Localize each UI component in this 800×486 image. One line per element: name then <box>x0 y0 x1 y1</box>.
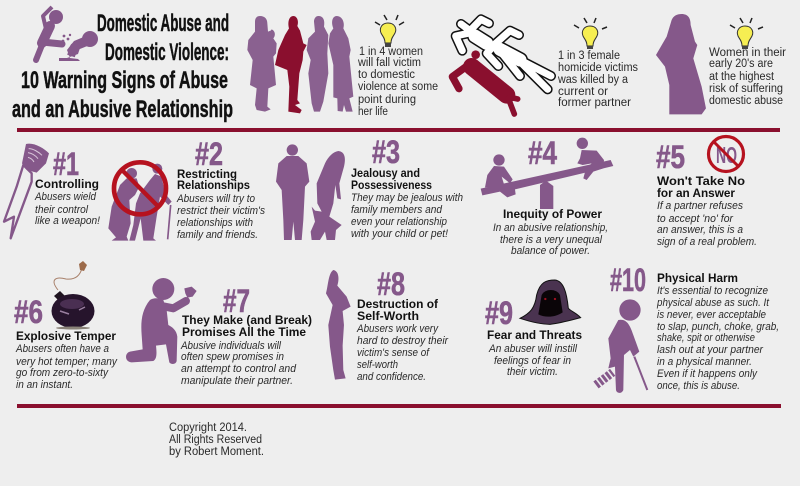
title <box>12 10 233 123</box>
panel: sign 3 jealousy and possessiveness: Possessiveness <box>351 180 432 192</box>
panel: sign 2 restricting relationships: Abusers will try to <box>176 193 255 205</box>
icon: crime scene body outlines <box>452 19 551 114</box>
icon: crossed out NO: NO <box>716 142 737 168</box>
panel: sign 8 destruction of self-worth: Self-Worth <box>357 311 419 323</box>
icon: woman silhouette <box>656 14 706 114</box>
stat: 1 in 3 female homicide victims: was killed by a <box>557 74 629 86</box>
stat: 1 in 4 women: will fall victim <box>357 57 421 69</box>
panel: sign 9 fear and threats <box>485 280 582 378</box>
panel: sign 5 won't take no for an answer: to accept 'no' for <box>657 213 734 225</box>
panel: sign 2 restricting relationships: relationships with <box>177 217 253 229</box>
panel: sign 1 controlling: Controlling <box>35 179 99 191</box>
stat: 1 in 3 female homicide victims: former partner <box>558 97 631 109</box>
title: Domestic Abuse and <box>97 10 229 37</box>
icon: raised fist <box>4 144 49 238</box>
panel: sign 4 inequity of power: In an abusive relationship, <box>493 222 608 234</box>
icon: seesaw with two figures <box>481 138 613 209</box>
panel: sign 10 physical harm: shake, spit or otherwise <box>657 332 755 344</box>
icon: kneeling man with flowers <box>126 278 197 364</box>
panel: sign 7 promises: Promises All the Time <box>182 327 306 339</box>
panel: sign 10 physical harm: is never, ever acceptable <box>657 309 766 321</box>
panel: sign 2 restricting relationships: #2 <box>195 136 223 172</box>
stat: women in their early 20's: risk of suffering <box>709 83 783 95</box>
stat: 1 in 4 women: violence at some <box>358 81 438 93</box>
panel: sign 8 destruction of self-worth: and confidence. <box>357 371 426 383</box>
stat: 1 in 3 female homicide victims: 1 in 3 female <box>558 50 620 62</box>
panel: sign 5 won't take no for an answer: an answer, this is a <box>657 224 743 236</box>
icon: injured man on crutch <box>596 299 647 393</box>
stat: 1 in 3 female homicide victims <box>557 50 638 109</box>
panel: sign 6 explosive temper: go from zero-to-sixty <box>16 367 109 379</box>
panel: sign 10 physical harm: It's essential to recognize <box>657 285 768 297</box>
stat: 1 in 4 women: her life <box>358 106 388 118</box>
panel: sign 2 restricting relationships <box>108 136 265 241</box>
panel: sign 10 physical harm: Physical Harm <box>657 273 738 285</box>
panel: sign 9 fear and threats: their victim. <box>507 366 558 378</box>
panel: sign 7 promises: manipulate their partner. <box>181 375 293 387</box>
panel: sign 6 explosive temper: Explosive Temper <box>16 331 117 343</box>
stat: 1 in 4 women <box>357 46 438 118</box>
panel: sign 2 restricting relationships: Restricting <box>177 169 237 181</box>
panel: sign 1 controlling: Abusers wield <box>34 191 97 203</box>
panel: sign 7 promises: often spew promises in <box>181 351 284 363</box>
panel: sign 2 restricting relationships: Relationships <box>177 180 250 192</box>
panel: sign 7 promises <box>126 278 312 387</box>
panel: sign 3 jealousy and possessiveness: even your relationship <box>351 216 447 228</box>
icon: angry bomb <box>52 261 94 330</box>
panel: sign 7 promises: They Make (and Break) <box>182 315 312 327</box>
stat: 1 in 3 female homicide victims: current or <box>558 86 608 98</box>
icon: man, woman and dog <box>276 144 345 240</box>
panel: sign 5 won't take no for an answer <box>656 136 757 248</box>
panel: sign 3 jealousy and possessiveness: They may be jealous with <box>351 192 463 204</box>
panel: sign 2 restricting relationships: restrict their victim's <box>177 205 265 217</box>
panel: sign 4 inequity of power: there is a very unequal <box>500 234 602 246</box>
panel: sign 6 explosive temper: very hot temper; many <box>16 356 118 368</box>
panel: sign 4 inequity of power <box>481 135 613 257</box>
panel: sign 10 physical harm: physical abuse as such. It <box>656 297 770 309</box>
panel: sign 5 won't take no for an answer: Won't Take No <box>657 176 745 188</box>
panel: sign 8 destruction of self-worth <box>326 266 449 383</box>
icon: light bulb two <box>574 18 607 49</box>
panel: sign 9 fear and threats: feelings of fear in <box>494 355 571 367</box>
panel: sign 5 won't take no for an answer: #5 <box>656 139 685 175</box>
icon: elderly couple in prohibition sign <box>108 162 172 241</box>
panel: sign 8 destruction of self-worth: Destruction of <box>357 299 438 311</box>
panel: sign 10 physical harm: in a physical manner. <box>657 356 752 368</box>
stat: women in their early 20's: domestic abuse <box>709 95 783 107</box>
panel: sign 7 promises: an attempt to control and <box>181 363 297 375</box>
panel: sign 3 jealousy and possessiveness: with your child or pet! <box>351 228 448 240</box>
panel: sign 6 explosive temper: Abusers often have a <box>15 343 109 355</box>
panel: sign 9 fear and threats: An abuser will instill <box>488 343 577 355</box>
panel: sign 5 won't take no for an answer: for an Answer <box>657 188 736 200</box>
panel: sign 10 physical harm <box>596 262 779 393</box>
panel: sign 5 won't take no for an answer: sign of a real problem. <box>657 236 757 248</box>
stat: 1 in 4 women: to domestic <box>358 69 415 81</box>
stat: 1 in 3 female homicide victims: homicide victims <box>558 62 638 74</box>
panel: sign 10 physical harm: once, this is abuse. <box>657 380 740 392</box>
panel: sign 3 jealousy and possessiveness: family members and <box>351 204 443 216</box>
title: and an Abusive Relationship <box>12 96 233 123</box>
icon: hooded figure <box>520 280 581 324</box>
panel: sign 3 jealousy and possessiveness: Jealousy and <box>351 168 420 180</box>
stat: 1 in 4 women: point during <box>358 94 416 106</box>
panel: sign 10 physical harm: #10 <box>610 262 646 298</box>
icon: abuser striking a victim <box>36 7 98 61</box>
panel: sign 8 destruction of self-worth: #8 <box>377 266 405 302</box>
panel: sign 6 explosive temper: in an instant. <box>16 379 73 391</box>
panel: sign 8 destruction of self-worth: hard to destroy their <box>357 335 449 347</box>
title: Domestic Violence: <box>105 39 229 66</box>
panel: sign 4 inequity of power: #4 <box>528 135 557 171</box>
panel: sign 10 physical harm: to slap, punch, choke, grab, <box>657 321 779 333</box>
panel: sign 4 inequity of power: Inequity of Power <box>503 209 603 221</box>
stat: women in their early 20's: early 20's are <box>709 58 773 70</box>
panel: sign 1 controlling: their control <box>35 204 88 216</box>
panel: sign 9 fear and threats: #9 <box>485 295 513 331</box>
panel: sign 5 won't take no for an answer: If a partner refuses <box>657 200 743 212</box>
panel: sign 7 promises: #7 <box>223 283 250 319</box>
stat: women in their early 20's <box>709 47 786 107</box>
panel: sign 6 explosive temper: #6 <box>14 294 43 330</box>
panel: sign 9 fear and threats: Fear and Threats <box>487 330 582 342</box>
panel: sign 8 destruction of self-worth: victim's sense of <box>357 347 431 359</box>
icon: group of four women <box>247 16 353 113</box>
copyright: Copyright 2014. <box>169 422 247 434</box>
panel: sign 7 promises: Abusive individuals will <box>180 340 281 352</box>
panel: sign 2 restricting relationships: family and friends. <box>177 229 258 241</box>
stat: women in their early 20's: at the highest <box>709 71 775 83</box>
panel: sign 1 controlling: like a weapon! <box>35 215 100 227</box>
panel: sign 3 jealousy and possessiveness <box>276 134 463 240</box>
copyright <box>169 422 264 458</box>
stat: women in their early 20's: Women in their <box>709 47 786 59</box>
panel: sign 4 inequity of power: balance of power. <box>511 245 590 257</box>
panel: sign 8 destruction of self-worth: self-worth <box>357 359 398 371</box>
panel: sign 3 jealousy and possessiveness: #3 <box>372 134 400 170</box>
icon: woman with folded arms <box>326 270 351 380</box>
icon: light bulb one <box>375 15 404 47</box>
panel: sign 1 controlling: #1 <box>53 146 79 182</box>
panel: sign 8 destruction of self-worth: Abusers work very <box>356 323 439 335</box>
panel: sign 10 physical harm: Even if it happens only <box>657 368 758 380</box>
panel: sign 10 physical harm: lash out at your partner <box>657 344 764 356</box>
stat: 1 in 4 women: 1 in 4 women <box>359 46 423 58</box>
title: 10 Warning Signs of Abuse <box>21 67 228 94</box>
copyright: by Robert Moment. <box>169 446 264 458</box>
icon: light bulb three <box>730 18 763 49</box>
panel: sign 1 controlling <box>4 144 100 238</box>
copyright: All Rights Reserved <box>169 434 262 446</box>
panel: sign 6 explosive temper <box>14 261 118 391</box>
